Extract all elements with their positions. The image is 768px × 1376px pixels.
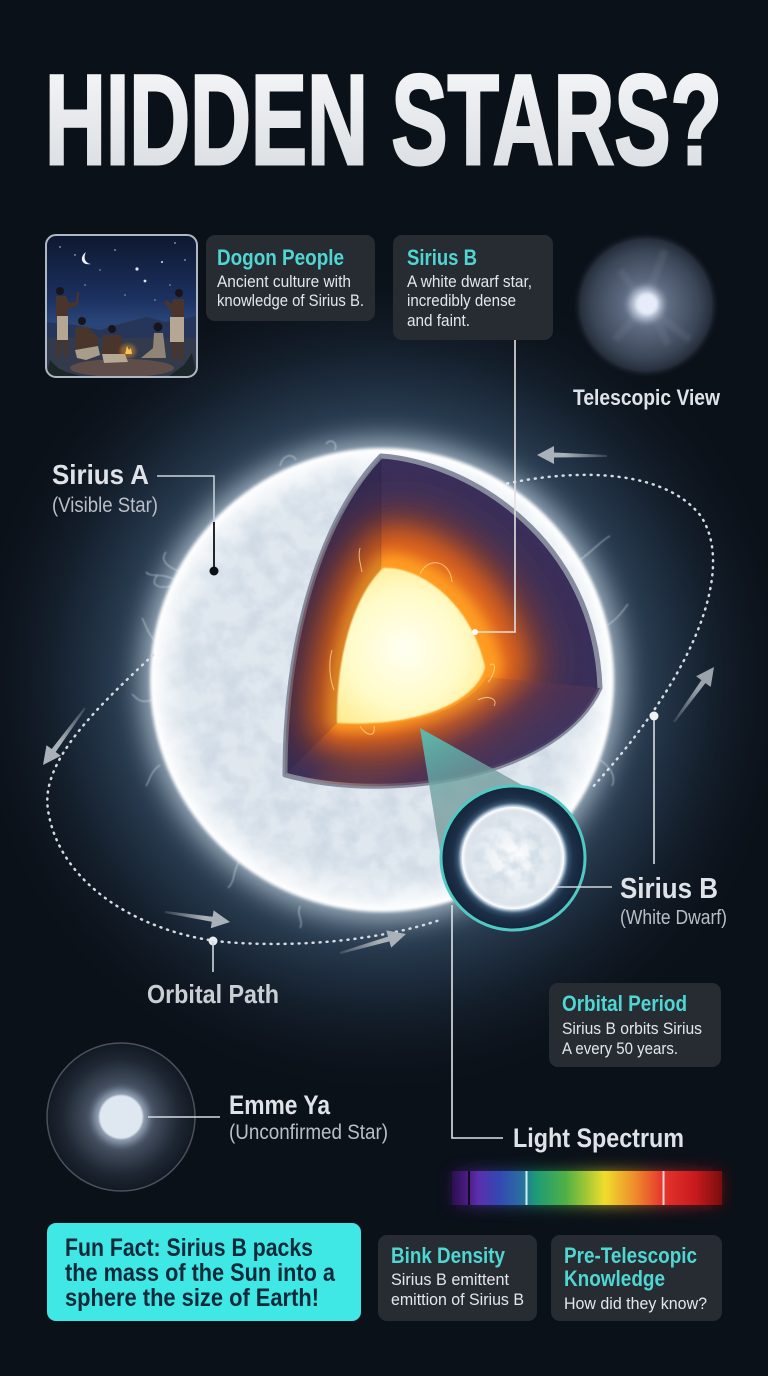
panel: Sirius B description: A white dwarf star,: [407, 272, 532, 291]
label: Telescopic View: Telescopic View: [573, 385, 721, 410]
arrow: orbit right: [673, 667, 714, 723]
callout leader: Sirius B core: [472, 340, 515, 635]
core flares: [330, 548, 495, 734]
heat bands: [270, 456, 600, 787]
leader: Orbital Path: [208, 936, 218, 972]
panel: Sirius B description: incredibly dense: [407, 291, 516, 310]
panel: Dogon People: Dogon People: [217, 245, 344, 270]
panel: Pre-Telescopic Knowledge: How did they know?: [564, 1294, 707, 1313]
panel: Orbital Period: A every 50 years.: [562, 1039, 678, 1058]
callout: Sirius B: (White Dwarf): [620, 907, 727, 929]
arrow: orbit top: [537, 446, 607, 464]
panel: Pre-Telescopic Knowledge: Pre-Telescopic: [564, 1243, 697, 1268]
leader: Light Spectrum: [452, 905, 503, 1138]
label: Orbital Path: Orbital Path: [147, 979, 279, 1009]
leader: Sirius A: [157, 476, 218, 576]
left wall shade: [285, 456, 381, 775]
leader: Sirius B white dwarf: [555, 886, 612, 888]
zoom beam: [420, 728, 545, 852]
icon: Sirius B magnifier: [441, 786, 585, 930]
telescopic view: [573, 232, 719, 378]
chart: light spectrum: [452, 1171, 722, 1205]
panel: Bink Density: emittion of Sirius B: [391, 1290, 524, 1309]
star surface texture: [169, 466, 596, 898]
arrow: orbit left: [43, 707, 86, 765]
callout: Emme Ya: [229, 1090, 388, 1144]
panel: Bink Density: Sirius B emittent: [391, 1270, 509, 1289]
panel: Bink Density: Bink Density: [391, 1243, 506, 1268]
panel: Sirius B description: Sirius B: [407, 245, 477, 270]
callout: Sirius B: Sirius B: [620, 873, 718, 905]
panel: Pre-Telescopic Knowledge: Knowledge: [564, 1266, 665, 1291]
cutaway: [270, 456, 600, 787]
leader: orbit to Sirius B: [650, 712, 658, 864]
core: [337, 568, 485, 724]
panel: Orbital Period: Orbital Period: [562, 991, 687, 1016]
standing figure left: [56, 287, 79, 357]
mountains: [47, 316, 196, 338]
panel: Sirius B description: [393, 235, 553, 340]
arrow: orbit bottom centre: [340, 930, 406, 954]
seated figure 1: [75, 317, 100, 360]
seated figure 2: [102, 325, 128, 363]
callout: Sirius A: (Visible Star): [52, 494, 158, 517]
panel: Dogon illustration: [46, 235, 197, 377]
panel: Dogon People: knowledge of Sirius B.: [217, 291, 364, 310]
lower wedge floor: [285, 677, 600, 787]
callout: Emme Ya: (Unconfirmed Star): [229, 1121, 388, 1144]
ground: [46, 338, 197, 377]
callout: Sirius B: [620, 873, 727, 929]
seated figure 3: [141, 322, 166, 358]
callout: Sirius A: [52, 459, 158, 517]
panel: Orbital Period: [549, 983, 721, 1067]
orbital path front: [47, 655, 440, 944]
background glow: [0, 260, 768, 1100]
night sky stars: [59, 242, 186, 301]
panel: Orbital Period: Sirius B orbits Sirius: [562, 1019, 702, 1038]
label: Light Spectrum: Light Spectrum: [513, 1123, 684, 1153]
crescent moon: [82, 252, 91, 264]
leader: Emme Ya: [148, 1116, 220, 1118]
callout: fun fact: [47, 1223, 361, 1321]
callout: Sirius A: Sirius A: [52, 459, 149, 490]
solar flares: [132, 441, 628, 928]
callout: Emme Ya: Emme Ya: [229, 1090, 331, 1120]
callout: fun fact: Fun Fact: Sirius B packs: [65, 1234, 313, 1262]
campfire: [120, 344, 136, 358]
panel: Pre-Telescopic Knowledge: [551, 1235, 722, 1321]
star: Sirius A: [132, 440, 628, 928]
star: Emme Ya: [47, 1043, 195, 1191]
panel: Bink Density: [378, 1235, 537, 1321]
vertical seam: [380, 458, 382, 566]
orbital path back: [480, 475, 713, 790]
panel: Dogon People: [206, 235, 375, 321]
callout: fun fact: sphere the size of Earth!: [65, 1284, 319, 1312]
standing figure right: [164, 289, 184, 360]
arrow: orbit bottom left: [165, 910, 230, 928]
callout: fun fact: the mass of the Sun into a: [65, 1259, 336, 1287]
panel: Dogon People: Ancient culture with: [217, 272, 351, 291]
photo frame: [46, 235, 197, 377]
panel: Sirius B description: and faint.: [407, 311, 470, 330]
